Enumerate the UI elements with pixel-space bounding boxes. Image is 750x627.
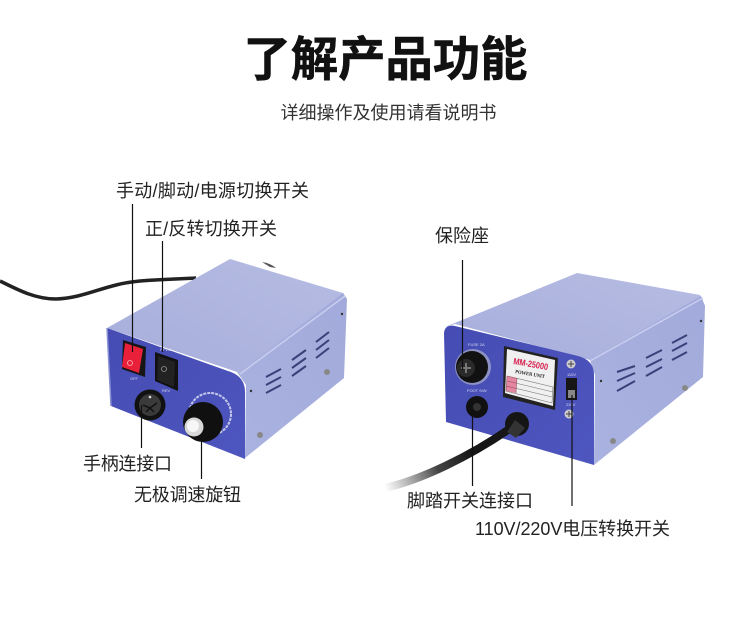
black direction switch: [155, 347, 178, 393]
label: foot switch socket: [407, 408, 533, 511]
label: foot switch socket: 脚踏开关连接口: [407, 491, 533, 511]
front panel: [107, 328, 245, 459]
subtitle: 详细操作及使用请看说明书: [280, 103, 496, 123]
right device: rear view of power unit: [385, 273, 705, 488]
side panel: [240, 293, 347, 458]
label: power switch: 手动/脚动/电源切换开关: [116, 181, 309, 201]
foot switch socket: [466, 388, 488, 418]
red rocker power switch: [122, 340, 146, 381]
black direction switch: F.FWD: [160, 347, 172, 352]
voltage selector: 220V: [566, 402, 576, 407]
label: handpiece socket: [83, 405, 172, 474]
rear panel: [444, 326, 594, 465]
label: direction switch: [145, 219, 277, 352]
label: speed knob: 无极调速旋钮: [134, 485, 241, 505]
product label plate: [503, 346, 558, 410]
fuse holder: FUSE 2A: [468, 342, 485, 347]
side panel: [590, 296, 705, 465]
label: fuse holder: 保险座: [435, 226, 489, 246]
red rocker power switch: OFF: [130, 376, 139, 381]
left device: front view of power unit: [0, 259, 347, 459]
label: direction switch: 正/反转切换开关: [145, 219, 277, 239]
voltage selector: [564, 360, 577, 418]
speed control knob: [183, 393, 231, 442]
top panel: [107, 259, 347, 385]
product label plate: POWER UNIT: [515, 370, 546, 380]
black direction switch: REV: [162, 388, 171, 393]
screws: [610, 438, 616, 444]
vents: [617, 335, 687, 391]
label: handpiece socket: 手柄连接口: [83, 454, 172, 474]
vents: [266, 332, 329, 393]
foot switch socket: FOOT S/W: [467, 388, 487, 393]
screws: [257, 432, 263, 438]
power cord: [0, 278, 196, 299]
label: voltage switch: 110V/220V电压转换开关: [475, 519, 670, 539]
title: 了解产品功能: [244, 34, 528, 87]
label: speed knob: [134, 440, 241, 505]
power cord: [385, 412, 529, 488]
top panel: [445, 273, 705, 372]
fuse holder: [455, 342, 491, 385]
voltage selector: 110V: [567, 372, 576, 377]
handpiece socket: [134, 390, 166, 420]
product label plate: MM-25000: [513, 356, 549, 372]
